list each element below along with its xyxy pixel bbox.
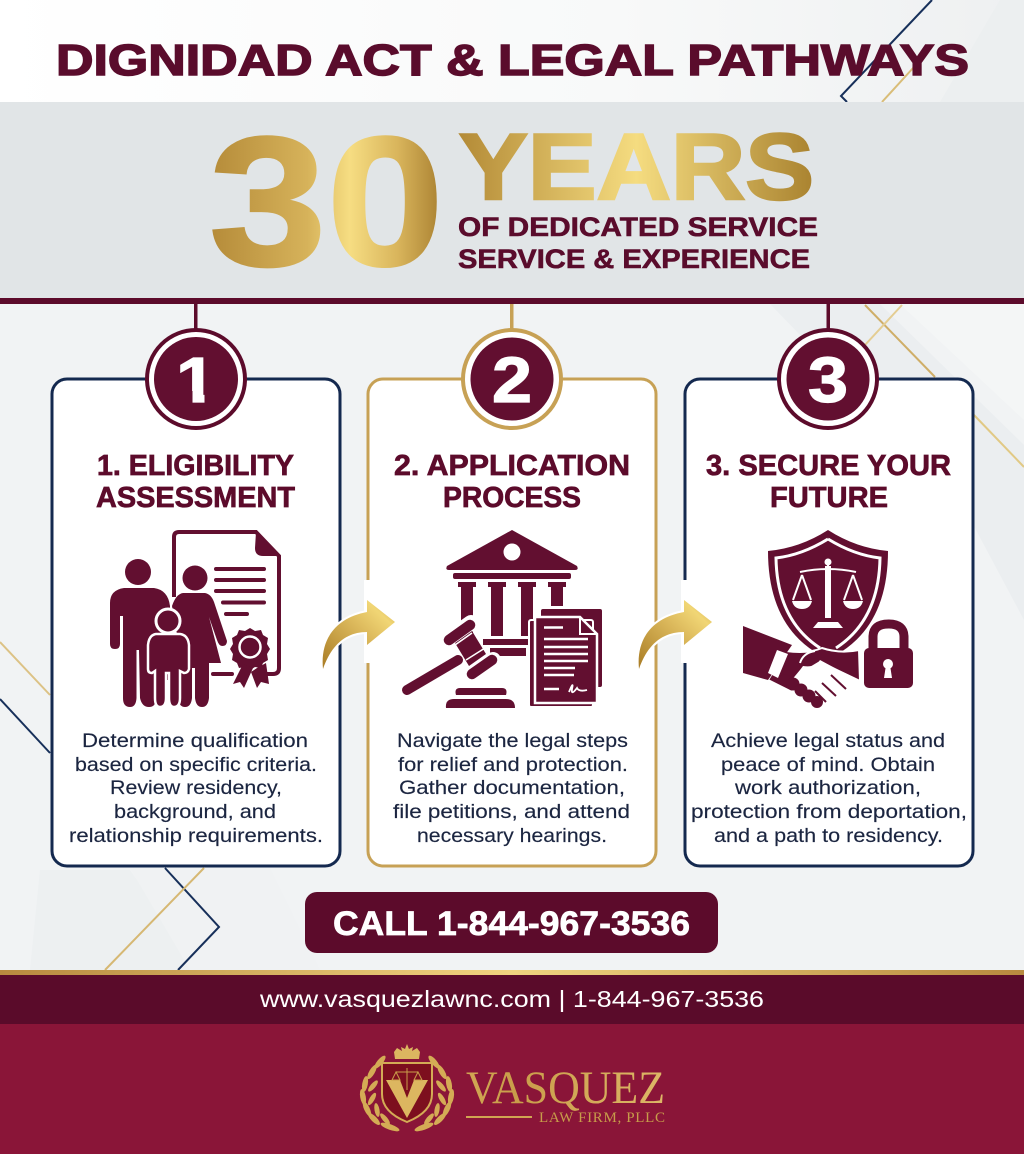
body text: file petitions, and attend xyxy=(393,801,630,823)
icon: courthouse, gavel and documents xyxy=(407,530,602,708)
contact strip xyxy=(0,975,1024,1024)
step badge 3: 3 xyxy=(808,344,848,416)
body text: necessary hearings. xyxy=(417,825,607,847)
arrow: step 2 to step 3 xyxy=(639,580,712,669)
heading: FUTURE xyxy=(770,482,888,514)
body text: background, and xyxy=(114,801,276,823)
gold rule xyxy=(0,970,1024,975)
body text: and a path to residency. xyxy=(714,825,943,847)
body text: relationship requirements. xyxy=(69,825,323,847)
step badge 2 xyxy=(463,330,561,428)
logo crest xyxy=(359,1044,455,1133)
subtitle: OF DEDICATED SERVICE xyxy=(458,212,818,242)
body text: work authorization, xyxy=(734,777,921,799)
logo wordmark: VASQUEZ xyxy=(466,1062,665,1114)
body text: for relief and protection. xyxy=(398,754,628,776)
call button: CALL 1-844-967-3536 xyxy=(333,905,690,943)
body text: Gather documentation, xyxy=(399,777,625,799)
heading xyxy=(96,450,296,514)
divider rule with stems xyxy=(0,298,1024,334)
heading: 2. APPLICATION xyxy=(394,450,630,482)
logo tagline: LAW FIRM, PLLC xyxy=(539,1110,665,1126)
heading xyxy=(394,450,630,514)
heading xyxy=(706,450,951,514)
body text: peace of mind. Obtain xyxy=(721,754,935,776)
body text: Navigate the legal steps xyxy=(397,730,628,752)
subtitle xyxy=(458,212,818,274)
step badge 1 xyxy=(147,330,245,428)
banner: 30 years xyxy=(0,98,1024,304)
footer band xyxy=(0,1024,1024,1154)
heading: 3. SECURE YOUR xyxy=(706,450,951,482)
step badge 3 xyxy=(779,330,877,428)
body text xyxy=(393,730,630,847)
body text: Achieve legal status and xyxy=(711,730,945,752)
body text xyxy=(691,730,967,847)
word YEARS: YEARS xyxy=(459,114,814,219)
contact strip: www.vasquezlawnc.com | 1-844-967-3536 xyxy=(259,986,764,1012)
arrow: step 1 to step 2 xyxy=(323,580,395,669)
body text xyxy=(69,730,323,847)
icon: family with certificate xyxy=(110,532,279,707)
body text: based on specific criteria. xyxy=(75,754,317,776)
number 30: 30 xyxy=(209,98,444,304)
heading: ASSESSMENT xyxy=(96,482,296,514)
heading: 1. ELIGIBILITY xyxy=(97,450,294,482)
heading: PROCESS xyxy=(443,482,581,514)
panel: secure your future xyxy=(685,330,973,866)
title: DIGNIDAD ACT & LEGAL PATHWAYS xyxy=(56,36,969,85)
body text: protection from deportation, xyxy=(691,801,967,823)
panel: application process xyxy=(368,330,656,866)
step badge 1: 1 xyxy=(176,344,216,416)
panel: eligibility assessment xyxy=(52,330,340,866)
step badge 2: 2 xyxy=(492,344,532,416)
body text: Review residency, xyxy=(110,777,282,799)
icon: shield, handshake and padlock xyxy=(743,530,913,708)
subtitle: SERVICE & EXPERIENCE xyxy=(458,244,810,274)
call button xyxy=(305,892,718,953)
body text: Determine qualification xyxy=(82,730,308,752)
logo: Vasquez Law Firm xyxy=(359,1044,665,1133)
